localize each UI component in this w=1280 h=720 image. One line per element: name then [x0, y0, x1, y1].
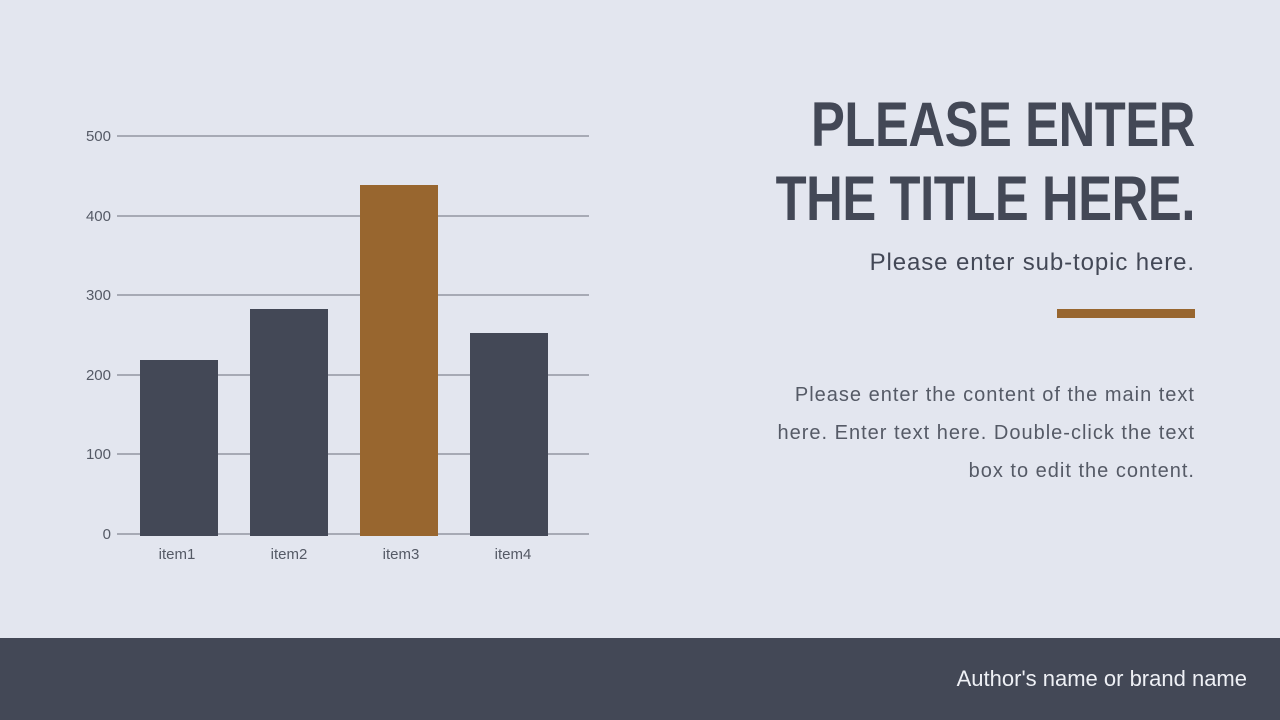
accent bar	[1057, 309, 1195, 318]
chart: bar chart: item2	[271, 546, 307, 563]
body text: here. Enter text here. Double-click the text	[777, 422, 1195, 444]
footer	[0, 638, 1280, 720]
chart: bar chart: item4	[495, 546, 531, 563]
body text: box to edit the content.	[969, 460, 1195, 482]
chart: bar chart: 0	[103, 526, 111, 543]
chart: bar chart: 300	[86, 287, 111, 304]
chart: bar chart: 100	[86, 446, 111, 463]
title	[776, 90, 1195, 234]
subtitle: Please enter sub-topic here.	[870, 249, 1195, 276]
title: PLEASE ENTER	[811, 90, 1195, 160]
title: THE TITLE HERE.	[776, 164, 1195, 234]
chart: bar chart	[86, 128, 589, 563]
chart: bar chart: 200	[86, 367, 111, 384]
chart: bar chart: 500	[86, 128, 111, 145]
author name: Author's name or brand name	[957, 666, 1247, 691]
chart: bar chart: item1	[159, 546, 195, 563]
chart: bar chart: 400	[86, 208, 111, 225]
chart: bar chart: item3	[383, 546, 419, 563]
body text	[777, 384, 1195, 482]
body text: Please enter the content of the main text	[795, 384, 1195, 406]
